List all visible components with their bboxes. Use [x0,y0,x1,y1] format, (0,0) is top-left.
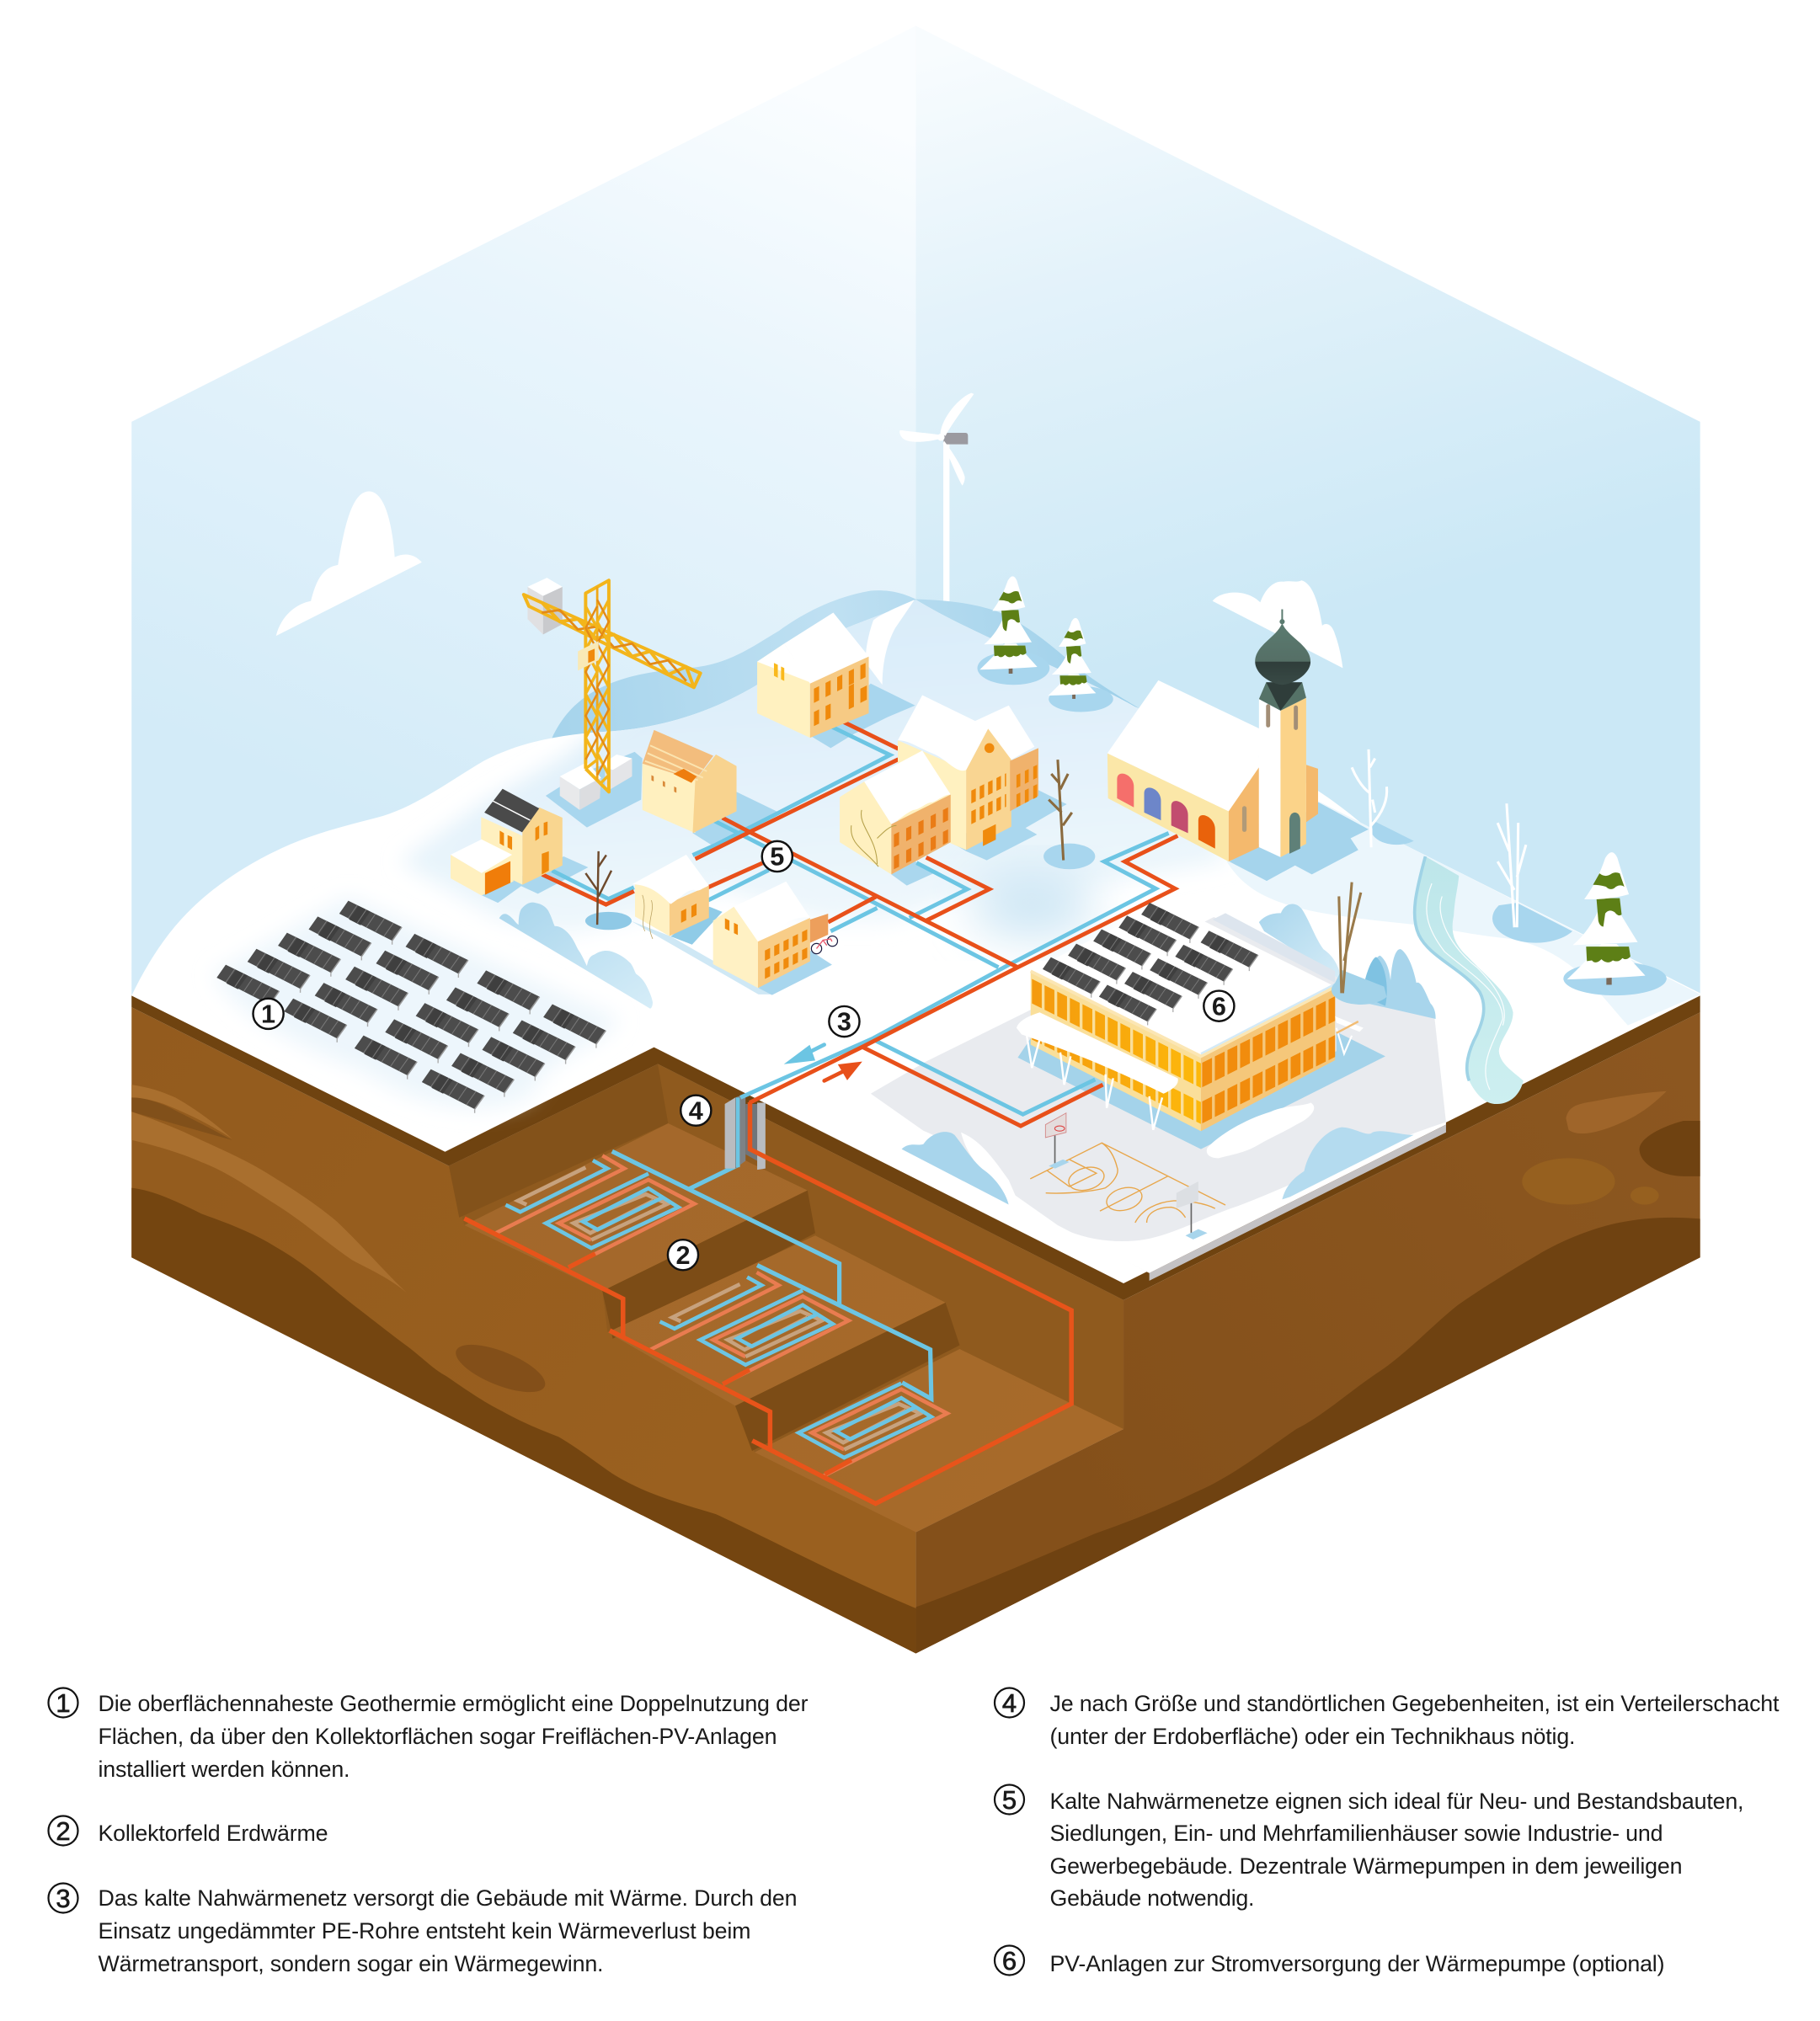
school shadow [1017,1032,1385,1149]
earth: light streak lower [131,1112,406,1293]
collector coil field two [650,1272,849,1384]
shadow: houses F G [891,790,1067,886]
surface warm pipes [542,722,1177,1126]
fir tree two disc [1049,686,1113,712]
white tree two [1492,803,1572,943]
earth: pit underlay [449,1064,1123,1533]
hill: blue backdrop [552,590,1155,800]
legend item 4: Je nach Größe und standörtlichen Gegebenheiten, ist ein Verteilerschacht [1049,1691,1780,1716]
shadow: house A [811,684,915,748]
legend item 1: installiert werden können. [98,1757,350,1782]
underground warm pipes [464,1102,1071,1504]
legend item 2 [49,1816,328,1846]
arrow: cold flow [791,1045,825,1062]
tower crane counterweight [527,578,563,635]
legend item 4: 4 [1002,1688,1017,1718]
bare tree centre [1043,760,1095,869]
underground cold pipes [612,1097,931,1399]
snow ground [131,600,1700,1283]
bush: right of tree [1364,949,1436,1019]
house C with solar roof and garage [451,789,563,895]
legend item 5: Gewerbegebäude. Dezentrale Wärmepumpen in dem jeweiligen [1049,1853,1683,1879]
snow: pale shaded slope [407,600,1220,933]
legend item 2: 2 [56,1816,71,1846]
bush: dark accent [1362,957,1387,1006]
earth: dark stratum right [915,1218,1700,1654]
wind turbine [899,393,974,618]
legend item 6: PV-Anlagen zur Stromversorgung der Wärmepumpe (optional) [1049,1951,1664,1976]
fir tree three body [1567,852,1646,984]
solar field: PV arrays [216,901,606,1113]
marker 4 [680,1096,711,1126]
pit: back right wall [658,1064,1123,1429]
bush: front of school [902,1132,1009,1205]
legend item 3: Einsatz ungedämmter PE-Rohre entsteht kein Wärmeverlust beim [98,1918,751,1944]
marker 6: 6 [1212,992,1226,1021]
legend item 3 [49,1883,797,1976]
legend item 1: Die oberflächennaheste Geothermie ermöglicht eine Doppelnutzung der [98,1691,809,1716]
shaded snow near pipes [970,867,1094,939]
house G tall [898,696,1038,850]
cloud: right behind church [1213,580,1342,668]
legend item 1: Flächen, da über den Kollektorflächen sogar Freiflächen-PV-Anlagen [98,1724,777,1749]
pit: floor one [464,1123,808,1291]
fir tree two body [1049,618,1096,699]
marker 3: 3 [837,1008,851,1037]
pit: back left wall [449,1064,668,1218]
crane cab [578,641,599,670]
legend item 5: Siedlungen, Ein- und Mehrfamilienhäuser sowie Industrie- und [1049,1821,1663,1846]
illustration: isometric block diagram [131,26,1700,1654]
brown tree at school [1339,883,1361,993]
shadow: house C [481,856,588,903]
earth: small blob [1631,1186,1659,1205]
bush: lower right [1282,1128,1414,1199]
legend item 1: 1 [56,1688,71,1718]
marker 1 [253,999,284,1029]
legend item 4 [995,1688,1780,1749]
fir tree one disc [977,651,1049,685]
snow behind bush front [961,1133,1026,1218]
pit: floor three [755,1349,1123,1533]
bush: left field [499,903,653,1009]
marker 2 [668,1240,698,1270]
fir tree one body [979,576,1038,674]
basketball hoop near [1045,1113,1070,1169]
legend item 5: 5 [1002,1785,1017,1815]
marker 5: 5 [770,843,784,872]
yard slab edge [1150,1125,1446,1281]
earth: light streak upper [131,1085,232,1138]
shadow: house B [692,792,779,846]
earth: light blob lower [1522,1158,1615,1205]
sky wall: left [131,26,915,1006]
basketball hoop far [1177,1181,1208,1240]
marker 3 [829,1006,860,1037]
snow drift over yard front [871,1094,1446,1273]
surface cold pipes [552,727,1169,1114]
snow: white crescent below summit [866,600,915,685]
legend item 2: Kollektorfeld Erdwärme [98,1821,328,1846]
bare tree left [585,851,632,930]
cloud: left [276,492,422,636]
basketball court [1030,1143,1225,1223]
shadow: blocks [546,752,643,828]
legend item 6: 6 [1002,1946,1017,1976]
earth: top lip [131,995,1700,1300]
solar field: panel underlay [213,896,619,1108]
snow: pale band behind river [1227,787,1700,1026]
legend item 3: 3 [56,1884,71,1913]
legend item 5: Gebäude notwendig. [1049,1885,1255,1911]
sky wall: right [915,26,1700,1006]
school canopy with supports [1017,1012,1364,1130]
earth: left face [131,1007,915,1654]
distribution shaft [725,1094,766,1170]
earth: dark stratum left [131,1188,915,1654]
snow patch in front of school [1207,1103,1314,1158]
legend item 5: Kalte Nahwärmenetze eignen sich ideal für Neu- und Bestandsbauten, [1049,1789,1743,1814]
earth: darker streak [131,1097,232,1140]
arrow: warm flow [825,1064,858,1080]
house B under construction [643,730,737,833]
shadow: house E [759,951,832,995]
house A [757,613,869,738]
marker 1: 1 [261,1000,275,1029]
legend item 3: Wärmetransport, sondern sogar ein Wärmegewinn. [98,1951,603,1976]
schoolyard ground [871,917,1446,1273]
fir tree three disc [1563,962,1667,995]
shadow: church [1230,803,1369,881]
building blocks at crane base [560,755,632,810]
white tree one [1352,749,1414,847]
legend item 5 [995,1785,1743,1911]
pit: riser one [602,1191,815,1339]
shadow: house D pale strip [631,921,832,995]
marker 5 [762,841,793,872]
pit: floor two [607,1235,946,1405]
rooftop PV panels [1043,903,1258,1025]
school building [1031,902,1335,1131]
collector coil field three [798,1384,947,1477]
legend item 4: (unter der Erdoberfläche) oder ein Technikhaus nötig. [1049,1724,1575,1749]
earth: light blob right [1566,1091,1667,1133]
brown tree in school yard disc [1332,970,1386,1005]
marker 2: 2 [675,1241,691,1270]
tower crane [524,580,701,792]
river [1415,856,1524,1104]
bicycle [811,936,837,954]
legend item 1 [49,1688,809,1782]
house D [632,855,709,939]
earth: right face [915,1012,1700,1654]
pit: riser two [735,1303,960,1451]
bush: behind school [1259,904,1342,980]
shadow: house D [670,907,723,945]
house E [713,882,828,988]
earth: dark ellipse [450,1335,551,1402]
marker 6 [1204,991,1234,1021]
marker 4: 4 [689,1096,703,1125]
legend item 3: Das kalte Nahwärmenetz versorgt die Gebäude mit Wärme. Durch den [98,1885,797,1911]
earth: dark blob right [1640,1121,1700,1176]
church [1107,610,1318,861]
house F [840,750,951,874]
collector coil field one [496,1155,694,1267]
